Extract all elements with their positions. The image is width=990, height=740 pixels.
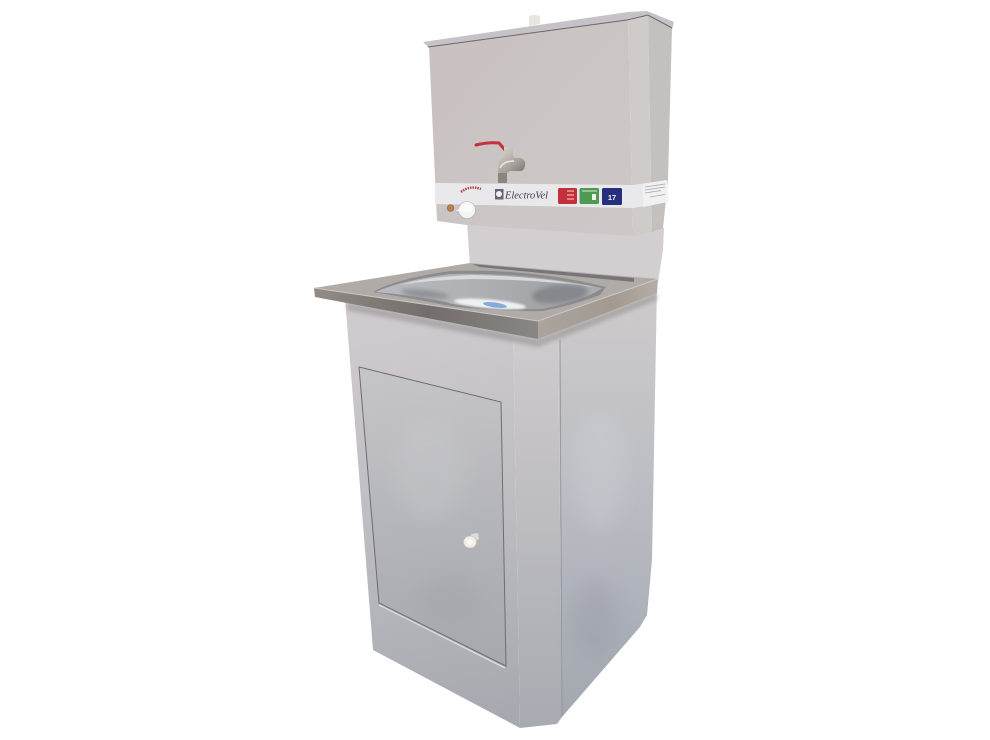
cabinet seam [560, 340, 562, 717]
basin back wall highlight [400, 275, 595, 287]
cabinet door [359, 367, 506, 668]
knob body [458, 202, 476, 218]
tank front face [429, 20, 633, 236]
door panel [359, 367, 506, 666]
control label band [435, 180, 668, 208]
tap handle [476, 143, 505, 150]
cabinet front face [345, 298, 520, 728]
brand logo: ElectroVel [504, 190, 548, 202]
lid filler cap [529, 15, 540, 26]
back groove [472, 264, 634, 282]
cabinet [345, 285, 657, 728]
indicator lamp [447, 205, 454, 211]
basin left shade [401, 288, 449, 300]
knob pointer [456, 204, 472, 212]
counter shadow [347, 293, 657, 347]
red badge [558, 188, 577, 204]
blue badge [602, 188, 622, 205]
cabinet side face [558, 285, 657, 717]
tap highlight [500, 161, 514, 168]
cabinet mottling [582, 590, 608, 642]
tank side face [648, 15, 672, 232]
basin bowl [376, 274, 602, 309]
counter surface [314, 263, 658, 321]
basin [373, 271, 606, 312]
thermostat knob [447, 202, 476, 218]
lid shadow line [428, 15, 672, 47]
water tank [423, 11, 674, 236]
sink top [314, 263, 658, 347]
water tap [476, 143, 525, 183]
door mottling [395, 420, 480, 625]
door knob [464, 533, 479, 548]
rim edge highlight [314, 279, 658, 321]
temperature scale [461, 188, 481, 192]
band strip [435, 180, 668, 208]
basin right lobe [531, 282, 589, 306]
tank corner facet [628, 15, 652, 236]
blue badge: 17 [608, 193, 616, 202]
backsplash panel [467, 222, 664, 282]
cabinet corner facet [513, 330, 562, 728]
tank lid [423, 11, 674, 47]
band side sticker [643, 180, 668, 207]
basin rim shadow [373, 271, 606, 311]
front rim [314, 288, 538, 339]
basin reflection [454, 296, 526, 312]
green badge [580, 188, 599, 204]
tap nozzle [498, 173, 507, 183]
washstand unit [314, 11, 674, 728]
right rim [538, 279, 658, 339]
door bottom highlight [379, 605, 505, 668]
basin blue reflection [483, 301, 507, 309]
tap body [498, 147, 525, 174]
